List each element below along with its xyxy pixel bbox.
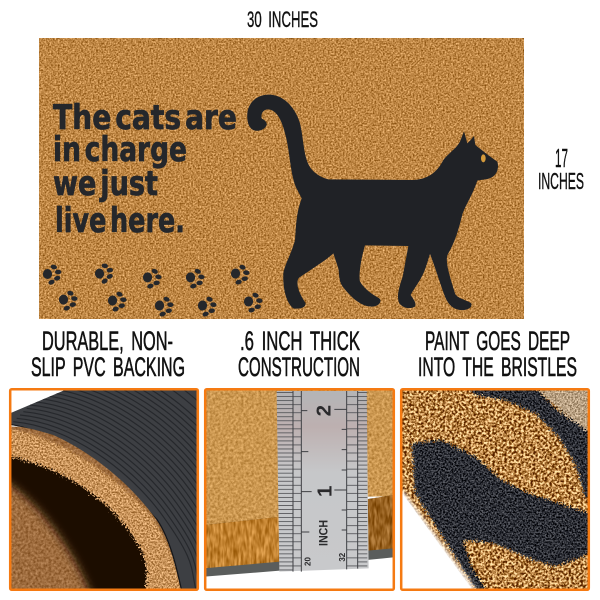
mat front face right <box>368 495 393 550</box>
mat top surface <box>203 390 393 527</box>
panel: paint in bristles photo <box>395 383 595 597</box>
orange frame <box>10 389 198 590</box>
dark interior shadow <box>11 454 169 588</box>
panel: rolled mat backing photo <box>8 388 200 591</box>
orange frame <box>205 389 394 590</box>
height label: 17 inches <box>538 143 584 194</box>
ruler scale lines <box>293 391 358 572</box>
panel: ruler thickness photo <box>203 389 395 590</box>
ruler right ticks <box>358 392 367 568</box>
ruler right inner ticks <box>347 392 358 569</box>
mat underside <box>10 427 187 593</box>
main dark painted band <box>412 440 595 593</box>
orange frame <box>401 389 589 590</box>
ruler left inner ticks <box>294 396 301 566</box>
doormat <box>39 38 524 319</box>
ruler left ticks <box>277 392 293 572</box>
mat front face left <box>203 517 280 570</box>
backing rib lines <box>12 390 196 588</box>
heading: backing <box>31 326 185 382</box>
white table corner <box>402 494 472 588</box>
ruler numerals: 20 <box>304 557 313 566</box>
width label: 30 inches: 30 INCHES <box>247 7 318 32</box>
mat slogan text: in charge <box>53 130 187 170</box>
black cat silhouette <box>247 95 498 310</box>
ruler numerals: INCH <box>316 520 330 546</box>
mat slogan text: The cats are <box>53 98 237 138</box>
ruler numerals: 1 <box>313 485 336 497</box>
ruler body <box>277 391 369 572</box>
heading: backing: SLIP PVC BACKING <box>31 352 185 382</box>
ruler numerals: 2 <box>312 405 335 416</box>
mat slogan text: we just <box>53 164 158 204</box>
coir edge band <box>7 428 183 597</box>
ribbed PVC backing <box>10 390 197 593</box>
mat coir surface <box>39 38 524 319</box>
coir bristles <box>402 390 588 588</box>
heading: thickness <box>238 326 360 382</box>
heading: backing: DURABLE, NON- <box>42 326 173 356</box>
ruler numerals: 32 <box>338 552 347 562</box>
mat slogan text: live here. <box>55 201 185 241</box>
heading: paint <box>418 326 577 382</box>
height label: 17 inches: 17 <box>555 143 568 173</box>
heading: thickness: .6 INCH THICK <box>240 326 360 356</box>
dark base strip <box>203 548 393 577</box>
white table corner soft edge <box>402 487 480 588</box>
heading: thickness: CONSTRUCTION <box>238 352 360 382</box>
upper dark stripe <box>467 387 595 503</box>
tan corner <box>536 390 588 434</box>
mat slogan text <box>53 98 237 241</box>
paw print trail <box>43 262 263 319</box>
ruler numerals <box>304 405 347 566</box>
